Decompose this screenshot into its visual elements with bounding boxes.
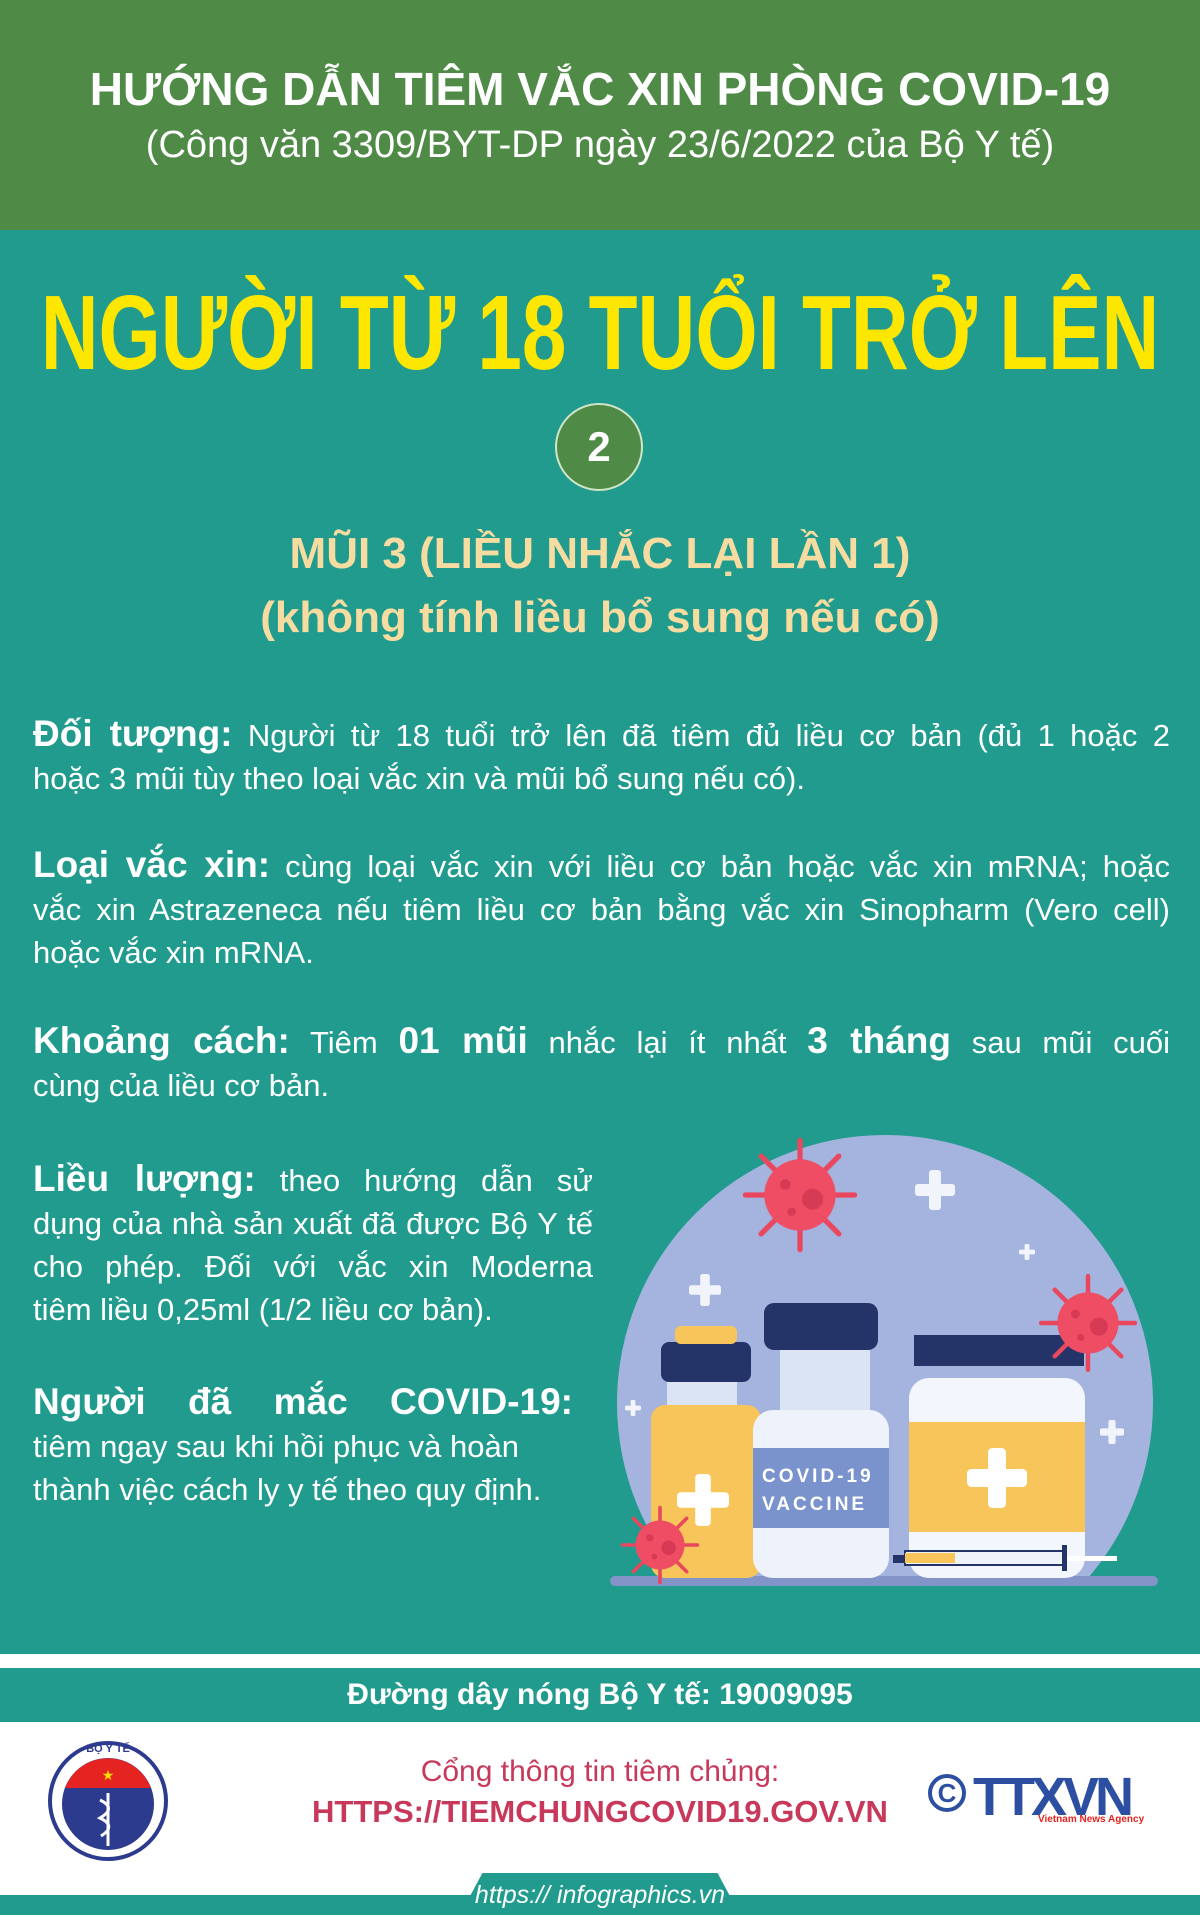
header band [0, 0, 1200, 230]
main panel [0, 230, 1200, 1654]
text: loai vac xin: Loại vắc xin: cùng loại vắc xin với liều cơ bản hoặc vắc xin mRNA; hoặc [33, 844, 1170, 885]
text: doi tuong [33, 713, 1170, 796]
dose heading [260, 529, 940, 642]
big heading: NGƯỜI TỪ 18 TUỔI TRỞ LÊN [41, 274, 1159, 392]
text: lieu luong: dụng của nhà sản xuất đã được Bộ Y tế [33, 1206, 593, 1241]
bottom strip [0, 1895, 1200, 1915]
text: loai vac xin [33, 844, 1170, 970]
text: khoang cach: cùng của liều cơ bản. [33, 1068, 329, 1103]
portal text: HTTPS://TIEMCHUNGCOVID19.GOV.VN [312, 1794, 888, 1829]
text: doi tuong: Đối tượng: Người từ 18 tuổi trở lên đã tiêm đủ liều cơ bản (đủ 1 hoặc 2 [33, 713, 1170, 754]
url tab: https:// infographics.vn [475, 1881, 725, 1909]
logo: ministry of health [48, 1741, 168, 1861]
illustration: vaccines: VACCINE [762, 1494, 867, 1515]
text: nguoi da mac: thành việc cách ly y tế theo quy định. [33, 1472, 541, 1507]
text: nguoi da mac: Người đã mắc COVID-19: [33, 1381, 573, 1422]
logo: ministry of health: BỘ Y TẾ [86, 1742, 130, 1755]
middle bottle [780, 1350, 870, 1420]
subtitle: (Công văn 3309/BYT-DP ngày 23/6/2022 của Bộ Y tế) [146, 124, 1054, 166]
syringe [905, 1551, 1065, 1565]
logo: TTXVN: C [938, 1778, 956, 1808]
dose heading: (không tính liều bổ sung nếu có) [260, 593, 940, 642]
left bottle [667, 1345, 737, 1405]
portal text [312, 1755, 888, 1829]
text: nguoi da mac [33, 1380, 573, 1507]
text: loai vac xin: hoặc vắc xin mRNA. [33, 935, 314, 970]
text: doi tuong: hoặc 3 mũi tùy theo loại vắc xin và mũi bổ sung nếu có). [33, 761, 805, 796]
text: lieu luong [33, 1158, 593, 1327]
hotline bar: Đường dây nóng Bộ Y tế: 19009095 [347, 1678, 853, 1711]
dose heading: MŨI 3 (LIỀU NHẮC LẠI LẦN 1) [290, 529, 910, 578]
text: khoang cach: Khoảng cách: Tiêm 01 mũi nhắc lại ít nhất 3 tháng sau mũi cuối [33, 1020, 1170, 1061]
number badge: 2 [587, 423, 611, 470]
portal text: Cổng thông tin tiêm chủng: [421, 1755, 779, 1788]
text: loai vac xin: vắc xin Astrazeneca nếu tiêm liều cơ bản bằng vắc xin Sinopharm (Vero cell) [33, 892, 1170, 927]
illustration: vaccines: COVID-19 [762, 1466, 874, 1487]
title: HƯỚNG DẪN TIÊM VẮC XIN PHÒNG COVID-19 [90, 63, 1110, 115]
text: nguoi da mac: tiêm ngay sau khi hồi phục và hoàn [33, 1429, 519, 1464]
number badge [555, 403, 643, 491]
text: khoang cach [33, 1020, 1170, 1103]
text: lieu luong: cho phép. Đối với vắc xin Moderna [33, 1249, 593, 1284]
logo: TTXVN: Vietnam News Agency [1038, 1814, 1144, 1825]
illustration: vaccines [610, 1135, 1158, 1586]
logo: TTXVN: TTXVN [973, 1767, 1130, 1827]
text: lieu luong: Liều lượng: theo hướng dẫn sử [33, 1158, 593, 1199]
hotline bar [0, 1668, 1200, 1722]
right jar [914, 1335, 1084, 1366]
logo: ministry of health: ★ [102, 1767, 114, 1783]
text: lieu luong: tiêm liều 0,25ml (1/2 liều cơ bản). [33, 1292, 493, 1327]
